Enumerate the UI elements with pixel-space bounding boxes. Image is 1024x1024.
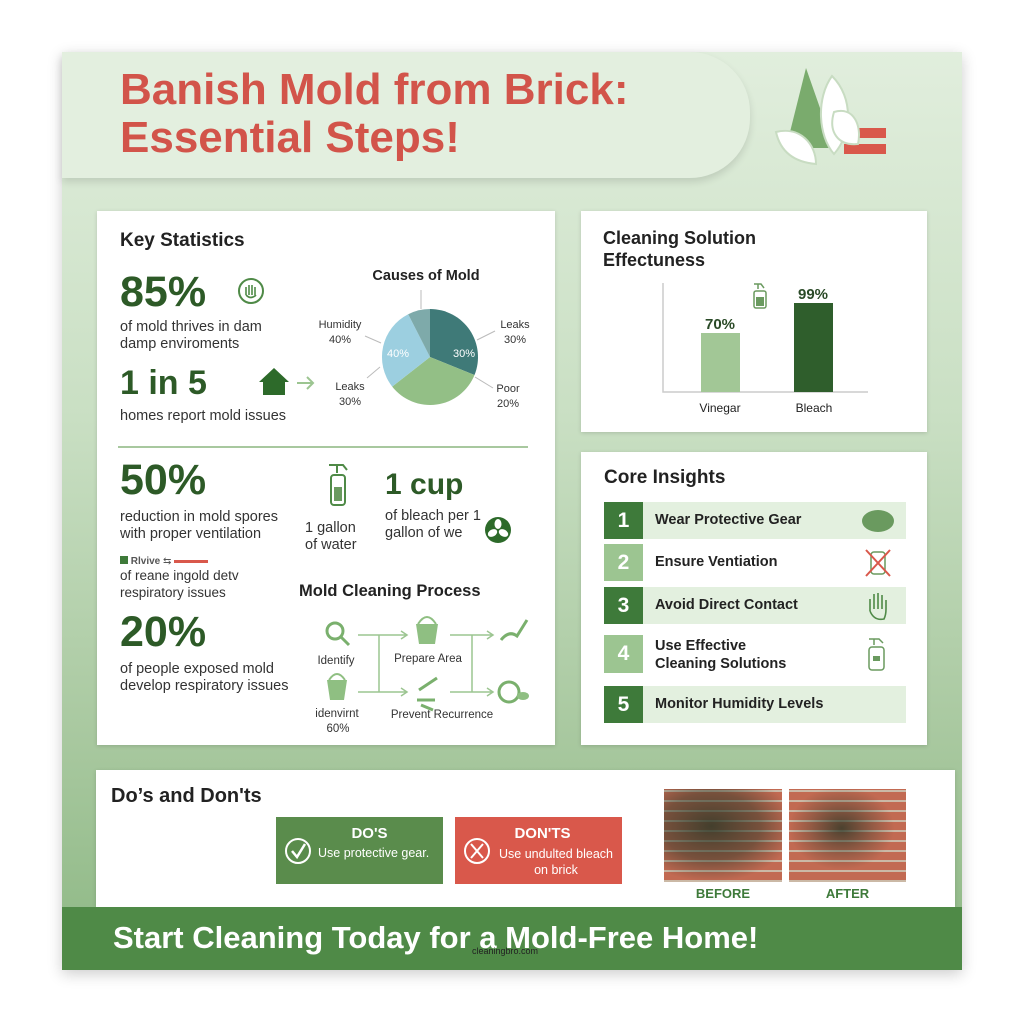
panel: do's and don'ts [96,770,955,907]
heading: Effectuness [603,250,705,270]
pie chart: causes of mold: 30% [453,348,475,360]
icon: spray bottle [329,464,348,506]
heading: mold cleaning process: Mold Cleaning Process [299,582,481,600]
title [120,65,628,162]
pie chart: causes of mold: 20% [497,398,519,410]
insight 3: Avoid Direct Contact [655,597,798,613]
pie chart: causes of mold: 30% [504,334,526,346]
stat 50%: reduction in mold spores [120,509,278,525]
heading: Cleaning Solution [603,228,756,248]
insight 2: Ensure Ventiation [655,554,777,570]
insight 1: Wear Protective Gear [655,512,801,528]
pie chart: causes of mold: 40% [329,334,351,346]
pie chart: causes of mold: Humidity [319,319,362,331]
pie chart: causes of mold: 40% [387,348,409,360]
insight 4 [604,635,906,673]
don'ts box: DON'TS [514,825,571,842]
title: Banish Mold from Brick: [120,65,628,114]
process flow diagram [315,616,529,735]
stat 20%: of people exposed mold [120,661,274,677]
insight 5: 5 [618,692,629,716]
stat 50% [120,456,278,542]
panel: key statistics [97,211,555,745]
stat 20%: 20% [120,608,206,656]
stat 1 cup [385,468,481,541]
stat 50%: 50% [120,456,206,504]
after image [789,789,906,882]
do's box: Use protective gear. [318,846,429,860]
stat 1 cup: 1 cup [385,468,463,501]
insight 5: Monitor Humidity Levels [655,696,823,712]
heading: Do’s and Don'ts [111,785,262,807]
text: garbled stat [120,556,239,600]
stat 50%: with proper ventilation [120,526,261,542]
do's box: DO'S [351,825,388,842]
stat 1 in 5 [120,364,286,424]
pie chart: causes of mold: Leaks [500,319,530,331]
insight 2 [604,544,906,581]
insight 1 [604,502,906,539]
bar chart: Vinegar [699,401,741,415]
bar chart: Bleach [796,401,832,415]
divider [118,446,528,448]
stat 1 in 5: homes report mold issues [120,408,286,424]
insight 4: Use Effective [655,638,746,654]
heading: Core Insights [604,467,725,488]
bar chart [662,283,868,415]
stat 1 in 5: 1 in 5 [120,364,207,402]
panel: do's and don'ts: AFTER [826,886,869,901]
stat 20% [120,608,288,694]
stat 85%: of mold thrives in dam [120,319,262,335]
labels before/after: BEFORE [696,886,750,901]
stat 1 cup: of bleach per 1 [385,508,481,524]
footer banner [62,907,962,970]
bar chart: 99% [798,286,828,303]
heading: Key Statistics [120,230,245,251]
pie chart: causes of mold: 30% [339,396,361,408]
stat 85%: damp enviroments [120,336,239,352]
insight 4: Cleaning Solutions [655,656,786,672]
text: 1 gallon: 1 gallon [305,520,356,536]
icon: fan [485,517,511,543]
icon: house arrow [259,368,314,395]
before image [664,789,782,882]
process flow diagram: 60% [326,723,350,735]
text: 1 gallon [305,520,357,553]
insight 2: 2 [618,550,629,574]
insight 1: 1 [618,508,629,532]
text: 1 gallon: of water [305,537,357,553]
don'ts box [455,817,622,884]
pie chart: causes of mold: Causes of Mold [372,268,480,284]
process flow diagram: idenvirnt [315,708,360,720]
insight 3 [604,587,906,624]
process flow diagram: Prepare Area [394,653,462,665]
pie chart: causes of mold: Poor [496,383,520,395]
insight 5 [604,686,906,723]
stat 85%: 85% [120,268,206,316]
panel: cleaning solution effectiveness [581,211,927,432]
do's box [276,817,443,884]
text: garbled stat: Rlvive ⇆ [131,556,171,567]
background panel [62,52,962,970]
stat 20%: develop respiratory issues [120,678,288,694]
pie chart: causes of mold: Leaks [335,381,365,393]
footer banner: Start Cleaning Today for a Mold-Free Home! [113,920,758,955]
title: Essential Steps! [120,113,460,162]
stat 85% [120,268,262,352]
don'ts box: on brick [534,863,578,877]
footer banner: cleaningbro.com [472,946,538,956]
text: garbled stat: of reane ingold detv [120,568,239,583]
pie chart: causes of mold [319,268,530,410]
bar chart: 70% [705,316,735,333]
insight 3: 3 [618,594,629,616]
stat 1 cup: gallon of we [385,525,462,541]
panel: core insights [581,452,927,745]
process flow diagram: Identify [317,655,355,667]
process flow diagram: Prevent Recurrence [391,709,493,721]
icon: leaves and brick [775,68,886,165]
heading [603,228,756,270]
icon: hand circle [238,278,264,304]
header banner [62,52,750,178]
text: garbled stat: respiratory issues [120,585,226,600]
insight 4: 4 [618,642,629,665]
don'ts box: Use undulted bleach [499,847,613,861]
